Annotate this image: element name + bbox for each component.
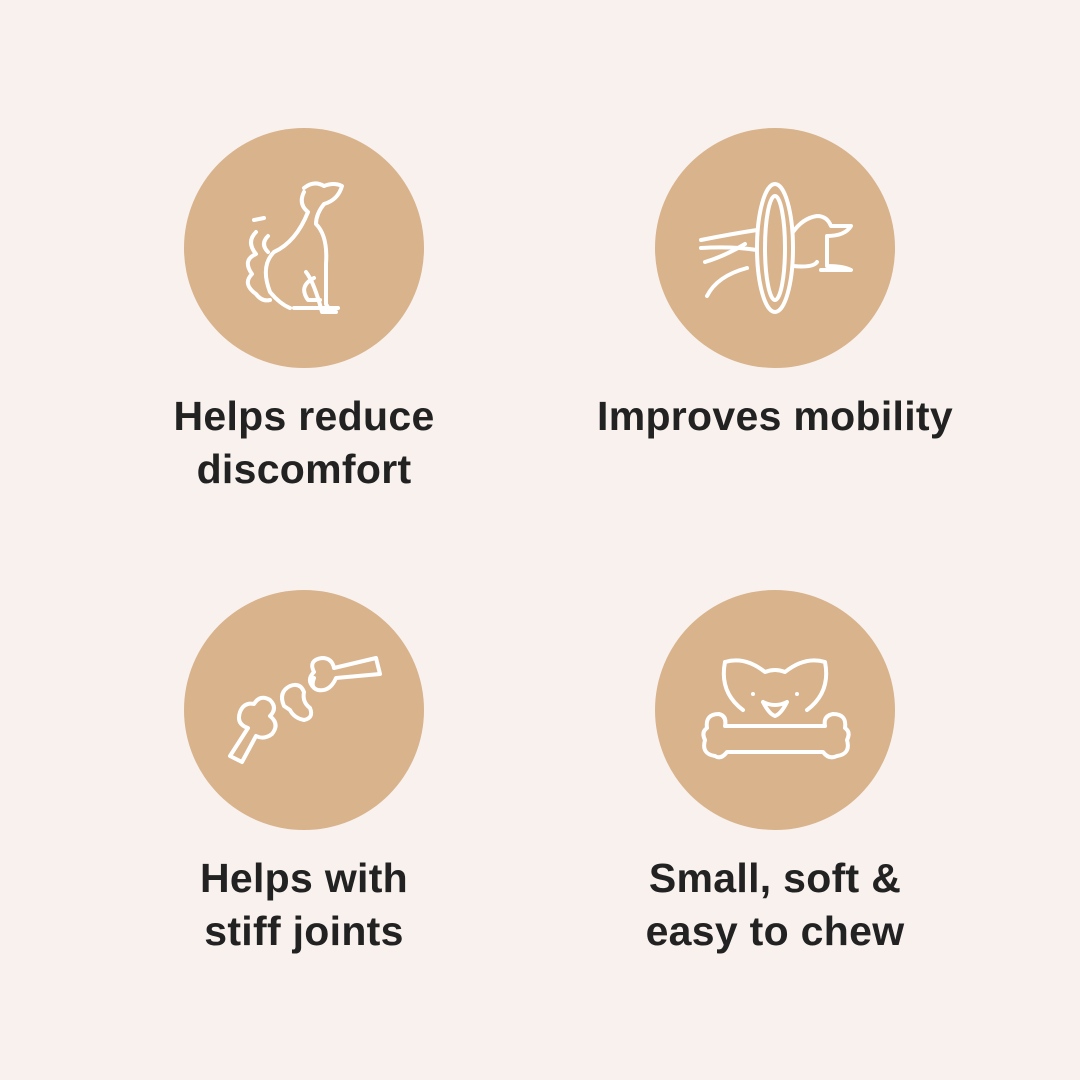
text: discomfort: discomfort [197,446,411,492]
text: discomfort: Helps reduce [173,393,435,439]
panel: mobility icon [655,128,895,368]
text: chew: easy to chew [646,908,904,954]
text: stiff joints [200,855,408,954]
text: discomfort [173,393,435,492]
text: mobility: Improves mobility [597,393,953,439]
text: stiff joints: Helps with [200,855,408,901]
panel: chew icon [655,590,895,830]
text: chew [646,855,904,954]
text: stiff joints: stiff joints [204,908,404,954]
panel: discomfort icon [184,128,424,368]
text: chew: Small, soft & [649,855,901,901]
panel: joints icon [184,590,424,830]
